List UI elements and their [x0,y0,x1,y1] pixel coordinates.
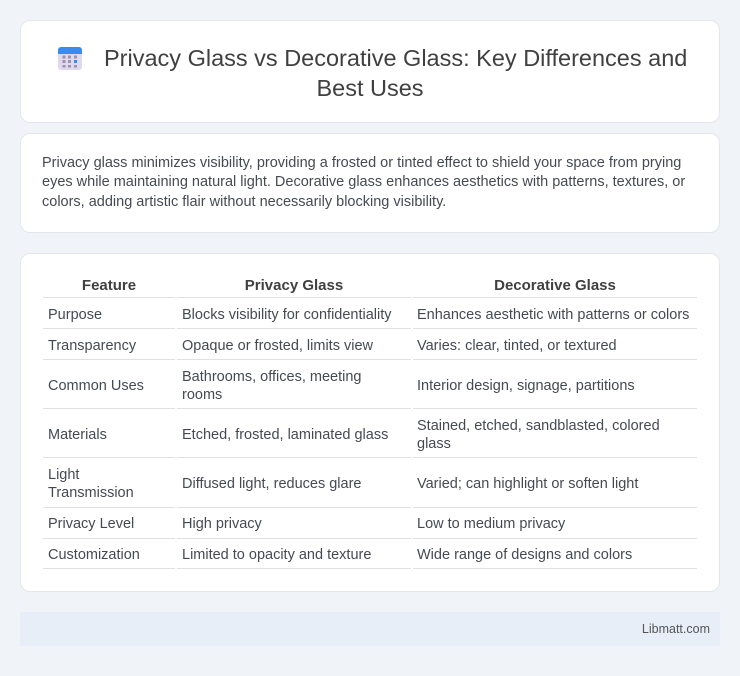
row: customization: Customization [48,547,140,563]
title [104,45,687,101]
row: purpose: Blocks visibility for confidentiality [182,307,392,323]
column headings: Privacy Glass [245,277,343,294]
row: transparency: Transparency [48,338,136,354]
row: common uses: Interior design, signage, partitions [417,378,635,394]
row: materials: Etched, frosted, laminated glass [182,427,388,443]
row: common uses [48,369,635,403]
row: privacy level: High privacy [182,516,262,532]
row: privacy level: Low to medium privacy [417,516,565,532]
row: transparency: Varies: clear, tinted, or textured [417,338,617,354]
row: privacy level [48,516,566,532]
row: light transmission: Light [48,467,79,483]
row: light transmission: Diffused light, reduces glare [182,476,361,492]
row: common uses: Common Uses [48,378,144,394]
row: purpose [48,307,689,323]
row: transparency [48,338,617,354]
intro paragraph: Privacy glass minimizes visibility, providing a frosted or tinted effect to shield your space from prying [42,154,681,170]
column headings [82,277,616,294]
row: privacy level: Privacy Level [48,516,134,532]
comparison table panel [20,253,720,592]
row: customization: Limited to opacity and texture [182,547,371,563]
title: Privacy Glass vs Decorative Glass: Key Differences and [104,45,687,71]
column headings: Feature [82,277,136,294]
row: purpose: Enhances aesthetic with patterns or colors [417,307,689,323]
row: materials: glass [417,436,451,452]
row: materials: Stained, etched, sandblasted, colored [417,418,660,434]
intro paragraph: colors, adding artistic flair without necessarily blocking visibility. [42,194,446,210]
footer credit: Libmatt.com [642,622,710,636]
row: purpose: Purpose [48,307,102,323]
title: Best Uses [316,75,424,101]
intro paragraph: eyes while maintaining natural light. Decorative glass enhances aesthetics with patterns, textures, or [42,174,685,190]
icon: calendar [58,47,82,70]
row: common uses: Bathrooms, offices, meeting [182,369,361,385]
row: light transmission: Varied; can highlight or soften light [417,476,638,492]
row: customization: Wide range of designs and colors [417,547,632,563]
footer bar [20,612,720,646]
column headings: Decorative Glass [494,277,616,294]
header card [20,20,720,123]
row: materials [48,418,660,452]
row: transparency: Opaque or frosted, limits view [182,338,373,354]
row: common uses: rooms [182,387,222,403]
row: customization [48,547,632,563]
row: light transmission [48,467,638,501]
row: materials: Materials [48,427,107,443]
intro paragraph [42,154,685,210]
intro text panel [20,133,720,233]
row: light transmission: Transmission [48,485,134,501]
